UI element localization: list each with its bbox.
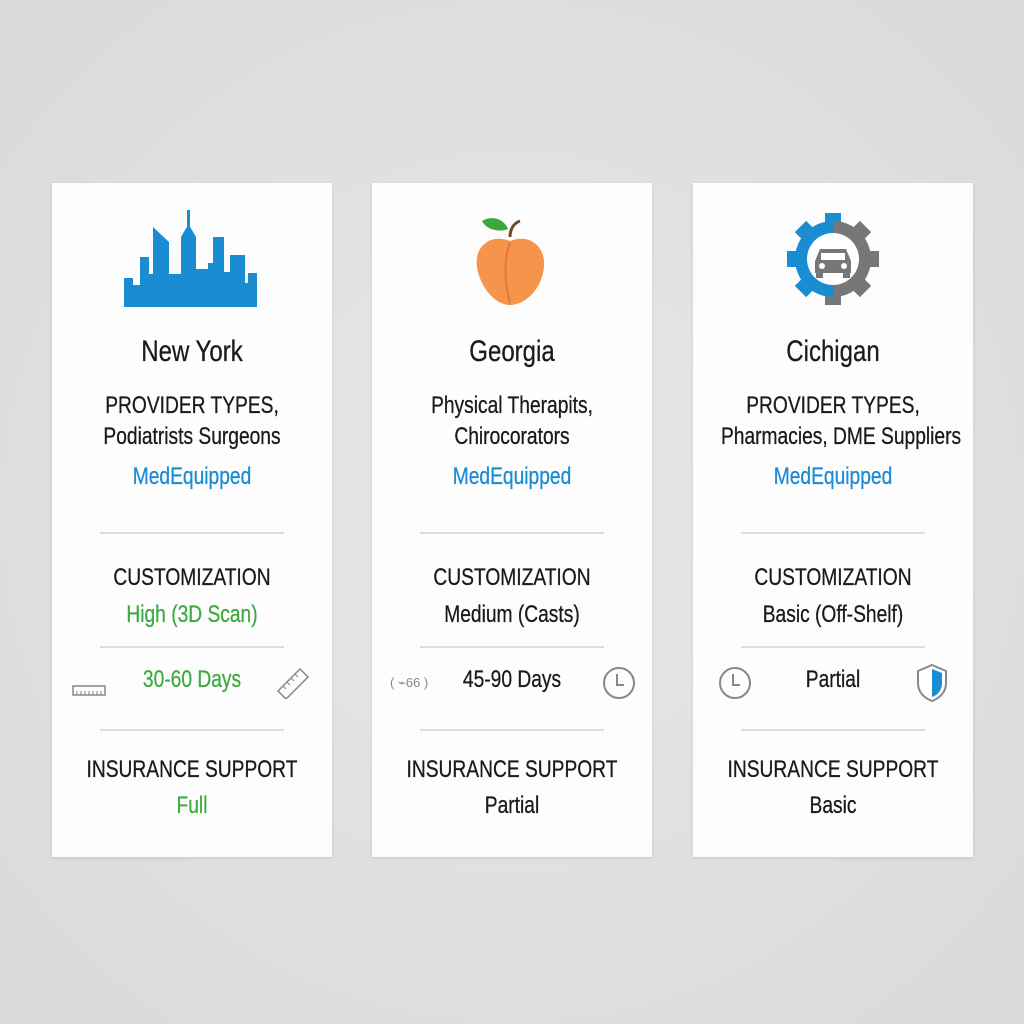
text: insurance: INSURANCE SUPPORT	[407, 756, 617, 783]
icon: peach	[476, 218, 544, 305]
text: provider types: PROVIDER TYPES,	[746, 392, 920, 419]
text: brand: MedEquipped	[453, 463, 571, 490]
icon: clock	[719, 667, 751, 699]
text: days: 30-60 Days	[143, 666, 241, 693]
text: insurance: INSURANCE SUPPORT	[728, 756, 938, 783]
card: Cichigan	[693, 183, 973, 857]
icon: angled ruler	[277, 668, 309, 699]
text: insurance: INSURANCE SUPPORT	[87, 756, 297, 783]
title: Georgia	[469, 335, 555, 368]
text: provider types: PROVIDER TYPES,	[105, 392, 279, 419]
text: days: 45-90 Days	[463, 666, 561, 693]
title: New York	[141, 335, 243, 368]
card: Georgia: Chirocorators	[454, 423, 570, 450]
card: Georgia: Medium (Casts)	[444, 601, 580, 628]
card: New York: Full	[177, 792, 207, 819]
text: customization: CUSTOMIZATION	[754, 564, 912, 591]
text: brand: MedEquipped	[133, 463, 251, 490]
icon: gear with car	[787, 213, 879, 305]
text: brand: MedEquipped	[774, 463, 892, 490]
text: customization: CUSTOMIZATION	[433, 564, 591, 591]
card: Cichigan: Basic (Off-Shelf)	[763, 601, 903, 628]
text: provider types: Physical Therapits,	[431, 392, 593, 419]
card: Cichigan: Basic	[810, 792, 856, 819]
card: Cichigan: Pharmacies, DME Suppliers	[721, 423, 961, 450]
text: partial: Partial	[806, 666, 860, 693]
card: New York: Podiatrists Surgeons	[103, 423, 281, 450]
icon: ruler	[72, 685, 106, 696]
card: Georgia: Partial	[485, 792, 539, 819]
text: customization: CUSTOMIZATION	[113, 564, 271, 591]
card: Georgia	[372, 183, 652, 857]
card: New York: High (3D Scan)	[126, 601, 258, 628]
icon: small symbol: ( ⌁66 )	[390, 675, 428, 690]
icon: shield	[917, 664, 947, 702]
icon: city skyline	[124, 210, 257, 307]
title: Cichigan	[786, 335, 880, 368]
card: New York	[52, 183, 332, 857]
icon: clock	[603, 667, 635, 699]
